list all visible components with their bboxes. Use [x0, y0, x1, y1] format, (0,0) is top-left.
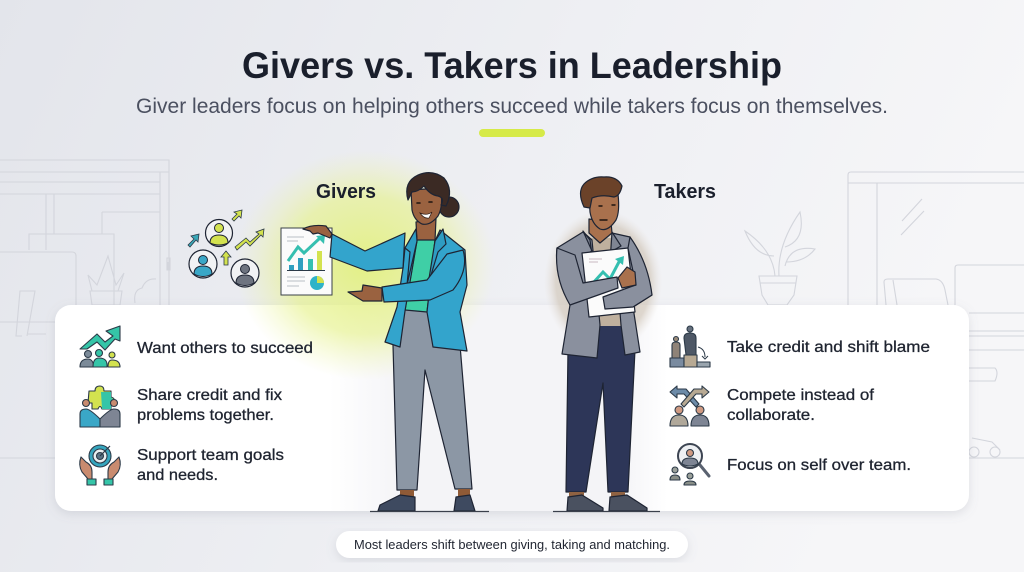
giver shirt — [405, 240, 435, 312]
text: share credit — [137, 387, 282, 424]
text: support team goals: and needs. — [137, 467, 218, 484]
accent bar — [479, 129, 545, 137]
text: support team goals: Support team goals — [137, 447, 284, 464]
text: compete: collaborate. — [727, 407, 815, 424]
glow behind taker — [544, 210, 662, 354]
giver bun — [439, 197, 459, 217]
giver lapels — [405, 229, 446, 285]
icon: growth team — [80, 326, 120, 367]
giver smile — [420, 212, 432, 218]
floor line: giver — [370, 510, 489, 512]
footer pill — [336, 531, 688, 558]
taker shirt — [590, 238, 622, 326]
icon: magnifier on self — [670, 444, 709, 485]
icon: team growth cluster — [188, 210, 264, 287]
taker pants — [566, 322, 635, 492]
background line art: left office — [0, 160, 170, 336]
taker blazer right front — [612, 233, 652, 355]
glow behind giver — [235, 150, 495, 380]
heading: givers: Givers — [316, 181, 376, 203]
report held by giver — [281, 228, 332, 295]
taker report chart — [593, 260, 620, 283]
giver open hand — [348, 285, 382, 301]
report held by taker — [582, 248, 635, 317]
taker hair — [580, 177, 622, 208]
panel: comparison card — [55, 305, 969, 511]
text: support team goals — [137, 447, 284, 484]
text: compete: Compete instead of — [727, 387, 875, 404]
giver neck — [416, 218, 436, 241]
icon: competing arrows — [670, 386, 709, 426]
heading: takers: Takers — [654, 181, 716, 203]
icon: podium with blame arrow — [670, 326, 710, 367]
giver hair — [407, 173, 450, 206]
text: focus on self: Focus on self over team. — [727, 457, 911, 474]
title: Givers vs. Takers in Leadership — [242, 45, 782, 86]
taker shoes — [567, 495, 647, 511]
giver shoes — [378, 495, 475, 511]
giver ankles — [400, 489, 470, 497]
giver hand on report — [303, 225, 332, 238]
giver pants — [393, 305, 472, 490]
taker neck — [589, 219, 612, 243]
taker lower arm — [603, 237, 652, 309]
giver forearm — [382, 250, 465, 302]
floor line: taker — [553, 510, 660, 512]
text: want others to succeed: Want others to succeed — [137, 340, 313, 357]
taker upper arm — [557, 248, 618, 305]
taker face — [589, 194, 619, 230]
icon: handshake and puzzle — [80, 386, 120, 427]
giver figure — [303, 173, 475, 511]
giver blazer left front — [385, 229, 417, 347]
text: compete — [727, 387, 875, 424]
giver face — [411, 188, 442, 224]
icon: target in hands — [80, 445, 120, 485]
taker figure — [557, 177, 652, 511]
giver blazer right front — [427, 230, 467, 351]
taker lapels — [583, 231, 621, 268]
text: share credit: problems together. — [137, 407, 274, 424]
taker ankles — [569, 492, 625, 498]
subtitle: Giver leaders focus on helping others succeed while takers focus on themselves. — [136, 95, 888, 118]
taker blazer left front — [557, 232, 600, 358]
text: take credit: Take credit and shift blame — [727, 339, 930, 356]
plant — [759, 276, 797, 305]
taker hand — [618, 267, 636, 288]
plant — [88, 256, 124, 305]
background line art: right office — [0, 172, 1024, 458]
text: share credit: Share credit and fix — [137, 387, 282, 404]
giver pointing arm — [330, 233, 405, 271]
footer pill: Most leaders shift between giving, taking and matching. — [354, 537, 670, 552]
